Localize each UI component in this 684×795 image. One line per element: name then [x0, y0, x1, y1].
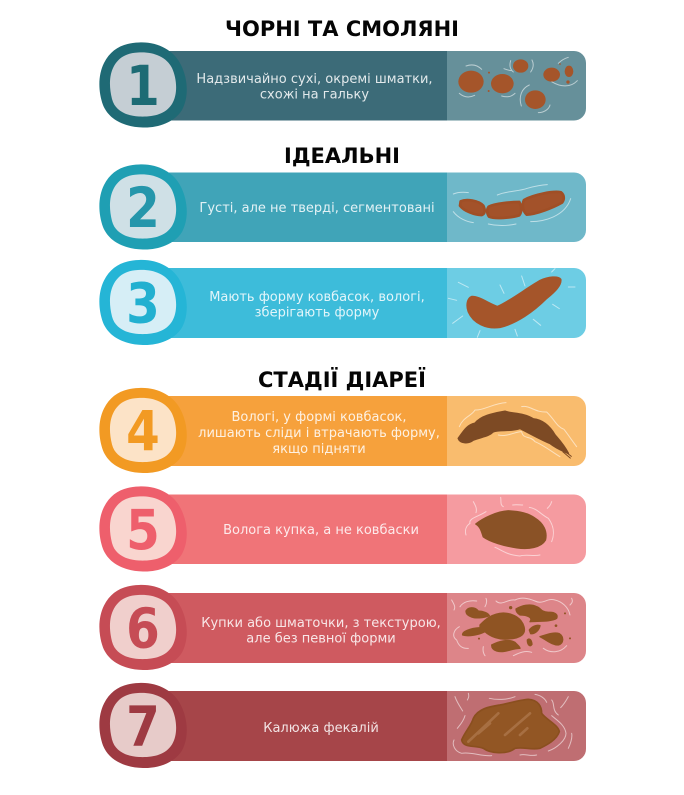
badge 4: 4 — [126, 401, 160, 464]
image panel 3 — [447, 268, 586, 338]
heading: diarrhea stages: СТАДІЇ ДІАРЕЇ — [258, 367, 426, 392]
image panel 1 — [447, 51, 586, 120]
heading: black and tarry: ЧОРНІ ТА СМОЛЯНІ — [225, 17, 459, 41]
text 4: лишають сліди і втрачають форму, — [198, 426, 440, 441]
badge 1 — [99, 42, 187, 128]
badge 4 — [99, 388, 187, 473]
bar 3 — [160, 268, 450, 338]
badge 7 — [99, 683, 187, 768]
badge 1: 1 — [126, 55, 160, 119]
text 4: Вологі, у формі ковбасок, — [231, 410, 407, 425]
icon: liquid puddle — [453, 693, 572, 756]
image panel 4 — [447, 396, 586, 466]
bar 2 — [160, 172, 450, 242]
text 1: Надзвичайно сухі, окремі шматки, — [196, 72, 433, 87]
badge 2 — [99, 164, 187, 250]
badge 5: 5 — [126, 499, 160, 563]
text 2: Густі, але не тверді, сегментовані — [199, 201, 435, 216]
badge 6 — [99, 585, 187, 670]
icon: segmented sausage — [453, 185, 571, 225]
image panel 5 — [447, 494, 586, 564]
bar 4 — [160, 396, 450, 466]
text 6: але без певної форми — [246, 632, 396, 646]
bar 5 — [160, 494, 450, 564]
image panel 7 — [447, 691, 586, 761]
heading: ideal: ІДЕАЛЬНІ — [284, 144, 400, 168]
row 1 — [99, 42, 586, 128]
text 3: Мають форму ковбасок, вологі, — [209, 290, 425, 305]
icon: soft blob — [465, 497, 553, 556]
row 5 — [99, 486, 586, 572]
icon: smooth sausage — [448, 269, 575, 337]
text 1: схожі на гальку — [260, 88, 369, 102]
row 7 — [99, 683, 586, 768]
image panel 2 — [447, 172, 586, 242]
text 3: зберігають форму — [255, 306, 380, 320]
text 7: Калюжа фекалій — [263, 721, 379, 736]
icon: soft wavy stool — [458, 403, 577, 458]
badge 3 — [99, 260, 187, 345]
badge 6: 6 — [126, 598, 160, 661]
badge 5 — [99, 486, 187, 572]
badge 3: 3 — [126, 273, 160, 336]
icon: separate pebbles — [458, 57, 577, 113]
row 6 — [99, 585, 586, 670]
image panel 6 — [447, 593, 586, 663]
text 6: Купки або шматочки, з текстурою, — [201, 616, 441, 631]
row 2 — [99, 164, 586, 250]
badge 2: 2 — [126, 177, 160, 241]
icon: fluffy pieces — [452, 598, 572, 656]
text 4: якщо підняти — [272, 442, 366, 457]
bar 6 — [160, 593, 450, 663]
row 4 — [99, 388, 586, 473]
row 3 — [99, 260, 586, 345]
text 5: Волога купка, а не ковбаски — [223, 523, 419, 538]
badge 7: 7 — [126, 696, 160, 759]
bar 7 — [160, 691, 450, 761]
bar 1 — [160, 51, 450, 120]
